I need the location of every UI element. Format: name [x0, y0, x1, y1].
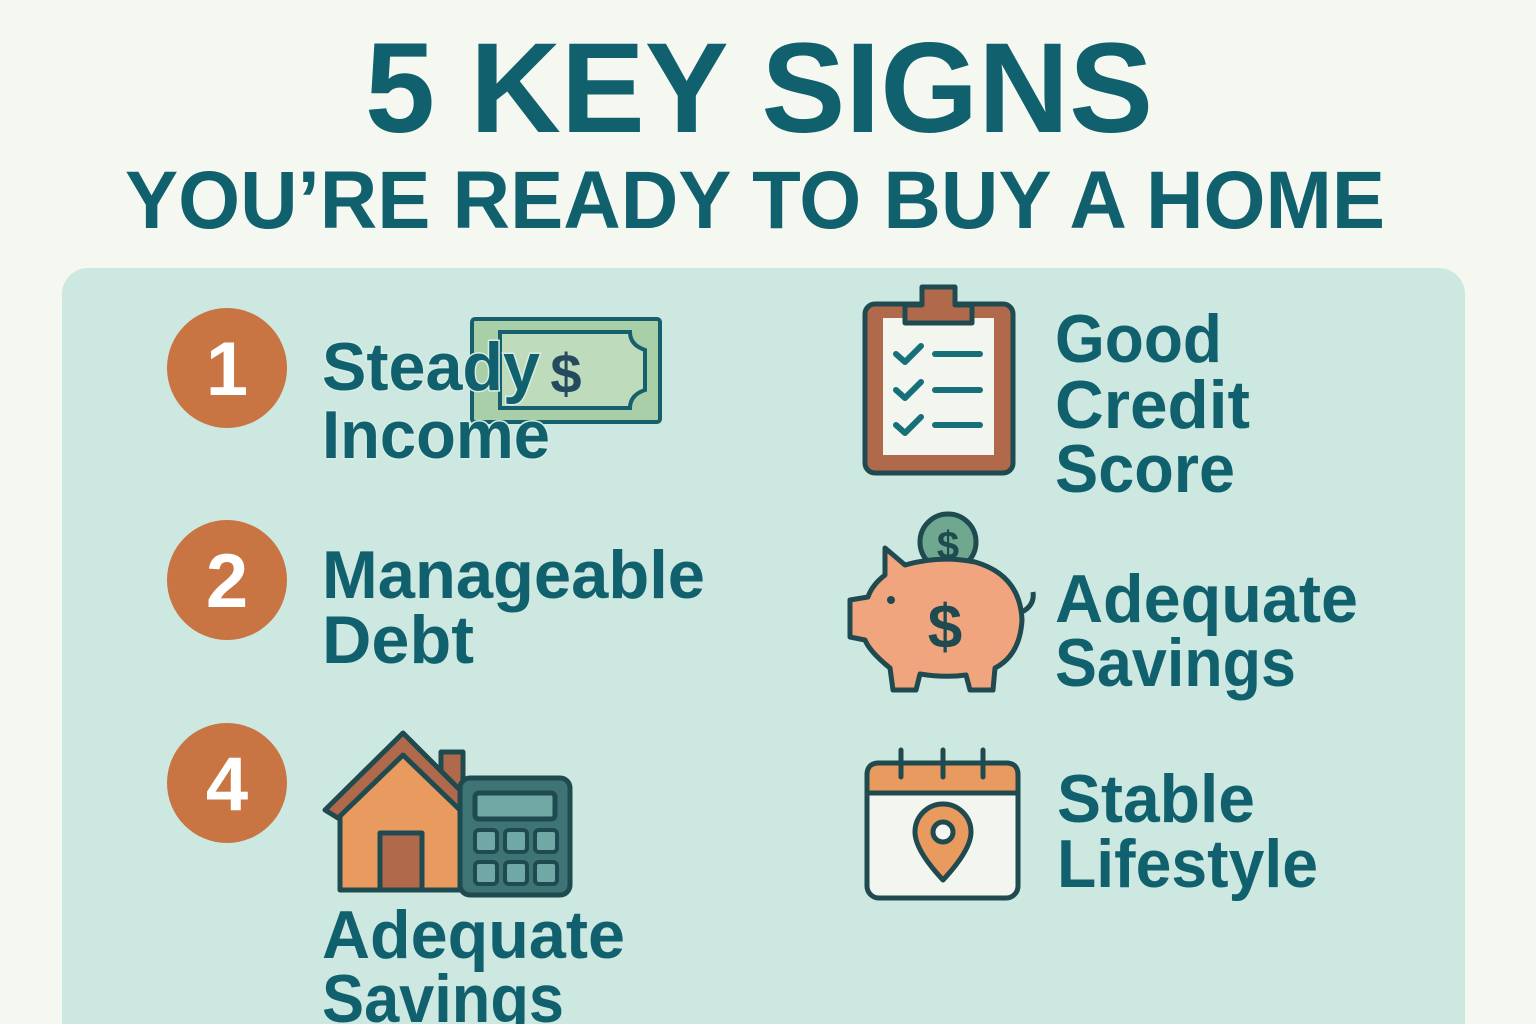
panel: signs	[62, 268, 1465, 1024]
number badge 2	[167, 520, 287, 640]
sign 4: adequate savings (house)	[167, 723, 625, 1024]
icon: calendar with pin	[867, 750, 1018, 898]
sign: adequate savings (piggy)	[850, 514, 1358, 701]
icon: piggy bank	[850, 514, 1033, 690]
number badge 2: 2	[206, 539, 248, 624]
icon: dollar bill	[472, 319, 660, 422]
icon: clipboard	[865, 287, 1013, 473]
sign: adequate savings (piggy): Adequate	[1055, 561, 1358, 637]
sign: good credit score: Credit	[1055, 367, 1250, 443]
sign 1: steady income: Steady	[322, 329, 540, 405]
sign 2: manageable debt	[167, 520, 705, 678]
icon: house and calculator	[325, 733, 570, 895]
sign: stable lifestyle	[867, 750, 1318, 902]
sign: good credit score: Good	[1055, 301, 1222, 377]
sign: good credit score	[865, 287, 1250, 507]
sign: stable lifestyle: Lifestyle	[1057, 826, 1318, 902]
icon: dollar bill: $	[550, 342, 582, 405]
number badge 1: 1	[206, 327, 248, 412]
number badge 1	[167, 308, 287, 428]
sign 2: manageable debt: Manageable	[322, 537, 705, 613]
sign 4: adequate savings (house): Adequate	[322, 897, 625, 973]
icon: piggy bank: $	[928, 593, 962, 662]
number badge 4	[167, 723, 287, 843]
sign: stable lifestyle: Stable	[1057, 761, 1255, 837]
sign 1: steady income	[167, 308, 660, 473]
title: 5 KEY SIGNS	[365, 17, 1153, 160]
icon: piggy bank: $	[937, 524, 959, 568]
sign: good credit score: Score	[1055, 431, 1235, 507]
subtitle: YOU’RE READY TO BUY A HOME	[125, 155, 1385, 246]
sign: adequate savings (piggy): Savings	[1055, 625, 1296, 701]
number badge 4: 4	[206, 742, 248, 827]
sign 1: steady income: Income	[322, 397, 550, 473]
sign 2: manageable debt: Debt	[322, 602, 474, 678]
title	[125, 17, 1385, 246]
